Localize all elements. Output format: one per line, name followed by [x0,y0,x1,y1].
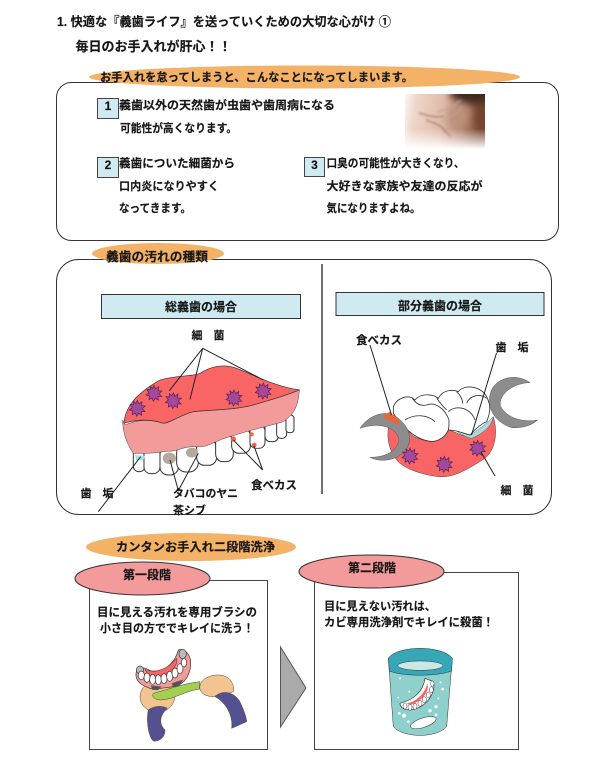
panel: types of denture dirt [56,243,552,517]
item 3 [304,156,483,215]
illustration: partial denture [360,377,538,477]
panel: neglect consequences [56,66,558,240]
item 3: 3 [311,158,318,172]
label: food debris: 食べカス [251,478,297,492]
label: partial denture: 部分義歯の場合 [398,298,482,313]
step 2 text: 目に見えない汚れは、 [324,599,436,613]
label: bacteria: 細 菌 [192,328,224,342]
item 1: 義歯以外の天然歯が虫歯や歯周病になる [119,98,335,112]
panel: step 2 [299,555,518,750]
panel: step 1 [75,562,268,750]
item 2 [98,156,235,215]
label: full denture [102,294,300,318]
photo: man in pain [405,94,485,148]
heading banner: neglect: お手入れを怠ってしまうと、こんなことになってしまいます。 [100,70,413,84]
item 1: 1 [105,99,112,113]
item 1: 可能性が高くなります。 [120,121,237,135]
step 1 text: 小さ目の方ででキレイに洗う！ [100,621,254,635]
illustration: denture in cleaning glass [388,648,452,735]
heading banner: types of dirt: 義歯の汚れの種類 [106,249,208,264]
label: full denture: 総義歯の場合 [165,299,237,314]
illustration: brushing denture [136,649,247,741]
item 2: 口内炎になりやすく [119,179,219,193]
item 2: 2 [105,158,112,172]
step 1 text [97,605,257,635]
title: 1. 快適な『義歯ライフ』を送っていくための大切な心がけ ① [57,14,391,29]
item 2: 義歯についた細菌から [119,156,235,170]
label: tea stain: 茶シブ [173,503,206,517]
step 2 text [324,599,494,629]
step 1 text: 目に見える汚れを専用ブラシの [97,605,257,619]
heading banner: two-step cleaning: カンタンお手入れ二段階洗浄 [116,539,275,554]
heading banner: two-step cleaning [86,533,296,561]
label: tobacco stain: タバコのヤニ [173,487,238,500]
subtitle: 毎日のお手入れが肝心！！ [76,39,232,54]
step 2 badge: 第二段階 [348,560,396,575]
item 1 [98,98,335,135]
heading banner: neglect [89,66,520,88]
item 3: 大好きな家族や友達の反応が [326,179,483,193]
step 1 badge [75,562,210,595]
step 1 badge: 第一段階 [123,567,171,582]
step 2 text: カビ専用洗浄剤でキレイに殺菌！ [324,615,494,629]
label: plaque partial: 歯 垢 [496,340,528,354]
heading banner: types of dirt [92,243,224,264]
arrow: step 1 to step 2 [280,647,306,727]
leader lines: partial denture [370,345,496,476]
label: plaque: 歯 垢 [80,486,114,500]
item 3: 口臭の可能性が大きくなり、 [326,156,464,170]
label: food debris partial: 食べカス [356,333,402,347]
illustration: full denture [98,348,299,512]
step 2 badge [299,555,444,588]
label: bacteria partial: 細 菌 [500,483,534,497]
item 3: 気になりますよね。 [326,201,420,215]
item 2: なってきます。 [119,202,191,215]
label: partial denture [336,292,544,316]
